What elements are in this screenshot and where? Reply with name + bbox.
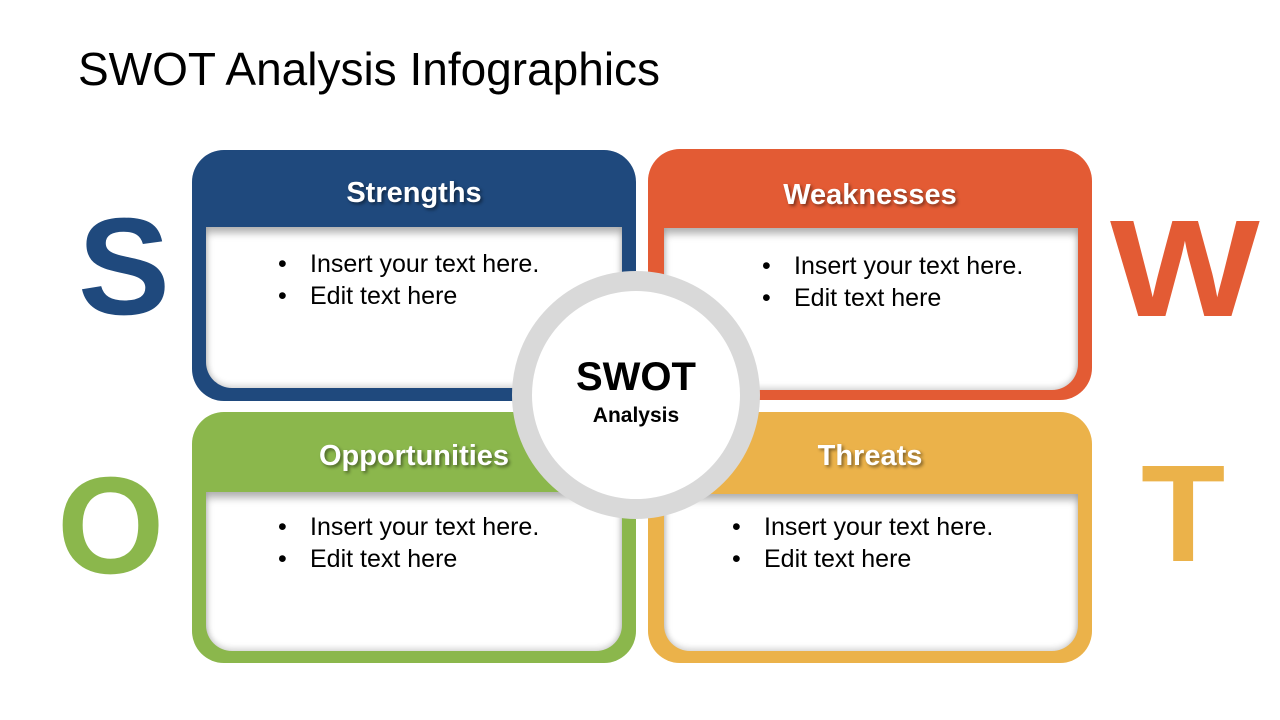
panel: threats bbox=[648, 412, 1092, 663]
letter S: S bbox=[78, 190, 170, 344]
center subtitle: Analysis bbox=[593, 404, 679, 427]
heading: strengths: Strengths bbox=[346, 177, 482, 209]
letter O: O bbox=[57, 449, 164, 603]
letter T: T bbox=[1141, 437, 1225, 591]
text: weaknesses bbox=[664, 228, 1078, 390]
heading: threats: Threats bbox=[818, 440, 922, 472]
text: opportunities: Insert your text here. bbox=[310, 513, 539, 541]
text: weaknesses: Insert your text here. bbox=[794, 252, 1023, 280]
heading: opportunities: Opportunities bbox=[319, 440, 509, 472]
text: strengths bbox=[206, 227, 622, 388]
text: strengths: Edit text here bbox=[310, 282, 457, 310]
text: threats: Insert your text here. bbox=[764, 513, 993, 541]
heading: weaknesses: Weaknesses bbox=[783, 179, 957, 211]
panel: weaknesses bbox=[648, 149, 1092, 400]
center title: SWOT bbox=[576, 355, 696, 399]
panel: strengths bbox=[192, 150, 636, 401]
text: threats bbox=[664, 494, 1078, 651]
letter W: W bbox=[1110, 192, 1260, 346]
title: SWOT Analysis Infographics bbox=[78, 43, 660, 95]
text: opportunities bbox=[206, 492, 622, 651]
center circle bbox=[512, 271, 760, 519]
text: weaknesses: Edit text here bbox=[794, 284, 941, 312]
text: strengths: Insert your text here. bbox=[310, 250, 539, 278]
panel: opportunities bbox=[192, 412, 636, 663]
text: opportunities: Edit text here bbox=[310, 545, 457, 573]
text: threats: Edit text here bbox=[764, 545, 911, 573]
